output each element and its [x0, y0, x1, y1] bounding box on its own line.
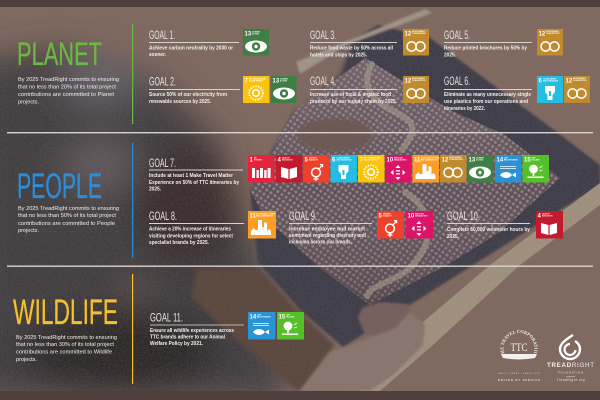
section divider top — [7, 132, 593, 133]
divider: wildlife — [132, 274, 133, 384]
goal 9: inclusion across our brands. — [289, 240, 353, 246]
goal 10: Complete 50,000 volunteer hours by — [447, 227, 530, 233]
text: people commitment: that no less than 50% of its total project — [18, 213, 117, 219]
icon: SDG 14 — [495, 155, 522, 182]
icon: SDG 13 — [271, 76, 296, 103]
goal 2: renewable sources by 2025. — [149, 99, 212, 105]
goal 1 — [149, 30, 239, 58]
icon: SDG 12: RESPONSIBLE — [573, 78, 587, 80]
goal 9: Increase employee and market — [289, 226, 365, 232]
goal 5: 2025. — [444, 52, 457, 58]
icon: SDG 14: BELOW WATER — [257, 316, 271, 319]
icon: SDG 15: ON LAND — [532, 159, 540, 162]
goal 2 — [149, 76, 240, 105]
icon: SDG 11 — [248, 211, 276, 238]
goal 3: Reduce food waste by 50% across all — [310, 46, 394, 52]
goal 10: GOAL 10. — [447, 211, 480, 223]
icon: SDG 7: AFFORDABLE AND — [364, 156, 381, 160]
logo: TreadRight Foundation: FOUNDATION — [558, 370, 583, 374]
text: wildlife commitment — [16, 335, 117, 363]
goal 11: GOAL 11. — [150, 312, 183, 324]
icon: SDG 13: ACTION — [476, 159, 484, 162]
logo: The Travel Corporation: THE TRAVEL CORPORATION — [500, 330, 538, 358]
icon: SDG 5: EQUALITY — [309, 159, 319, 162]
goal 6: itineraries by 2022. — [444, 106, 486, 112]
goal 8: visiting developing regions for select — [149, 234, 233, 240]
icon: SDG 13: CLIMATE — [476, 156, 485, 160]
goal 2: Source 50% of our electricity from — [149, 92, 228, 98]
photo: brown blur behind top row — [297, 118, 373, 152]
icon: SDG 10: 10 — [386, 158, 394, 164]
goal 6: GOAL 6. — [444, 76, 470, 88]
goal 7: Experience on 50% of TTC itineraries by — [149, 180, 239, 186]
icon: SDG 13: 13 — [244, 32, 252, 38]
top band — [0, 0, 600, 7]
icon: SDG 5 — [377, 211, 404, 238]
icon: SDG 12: CONSUMPTION — [412, 33, 426, 35]
icon: SDG 11: SUSTAINABLE CITIES — [420, 156, 440, 160]
icon: SDG 5: GENDER — [383, 214, 391, 216]
icon: SDG 4: QUALITY — [542, 212, 551, 216]
text: people commitment: contributions are committed to People — [18, 221, 115, 227]
icon: SDG 7: 7 — [360, 158, 364, 164]
icon: SDG 10 — [406, 211, 433, 238]
icon: SDG 6: AND SANITATION — [336, 159, 352, 162]
icon: SDG 12: 12 — [538, 32, 546, 38]
icon: SDG 15 — [277, 312, 304, 340]
photo: blurred person at left — [0, 48, 290, 400]
icon: SDG 4 — [536, 211, 563, 238]
goal 4: GOAL 4. — [310, 76, 336, 88]
logo: The Travel Corporation: DRIVEN BY SERVICE — [498, 378, 540, 382]
icon: SDG 12 — [440, 155, 466, 182]
icon: SDG 12: 12 — [404, 32, 412, 38]
logo: TreadRight Foundation — [547, 335, 594, 382]
icon: SDG 1 — [248, 155, 274, 182]
icon: SDG 6 — [537, 76, 563, 103]
icon: SDG 12: CONSUMPTION — [573, 80, 587, 82]
goal 3: GOAL 3. — [310, 30, 336, 42]
text: wildlife commitment: that no less than 30% of its total project — [16, 342, 115, 348]
goal 1: Achieve carbon neutrality by 2030 or — [149, 46, 233, 52]
icon: SDG 7: CLEAN ENERGY — [364, 159, 379, 162]
icon: SDG 11: 11 — [250, 214, 257, 220]
logo: The Travel Corporation: TTC — [510, 340, 528, 354]
text: people commitment — [18, 206, 119, 234]
icon: SDG 6: CLEAN WATER — [336, 156, 350, 160]
logo: The Travel Corporation: FAMILY OWNED | FAMILY RUN — [498, 372, 541, 375]
icon: SDG 13 — [243, 29, 269, 56]
text: wildlife commitment: contributions are committed to Wildlife — [16, 350, 112, 356]
goal 8: Achieve a 20% increase of itineraries — [149, 226, 231, 232]
text: planet commitment: By 2025 TreadRight commits to ensuring — [18, 77, 119, 83]
goal 6 — [444, 76, 532, 112]
photo: fingers — [358, 302, 412, 335]
goal 2: GOAL 2. — [149, 76, 176, 88]
section divider bottom — [7, 266, 593, 267]
icon: SDG 15: ON LAND — [286, 316, 295, 319]
heading: wildlife: WILDLIFE — [13, 293, 118, 332]
icon row: goal 7 SDGs — [248, 155, 549, 182]
goal 9 — [289, 211, 372, 246]
icon: SDG 15: LIFE — [286, 314, 291, 316]
icon: SDG 4: 4 — [278, 158, 282, 164]
goal 9: GOAL 9. — [289, 211, 317, 223]
goal 11 — [150, 312, 244, 347]
icon: SDG 7: CLEAN ENERGY — [249, 80, 264, 83]
icon: SDG 1: NO — [254, 158, 257, 160]
icon: SDG 12 — [537, 29, 563, 56]
icon: SDG 14: 14 — [496, 158, 504, 164]
icon: SDG 10: REDUCED — [394, 158, 404, 160]
photo: wooden frame — [358, 183, 600, 391]
goal 7 — [149, 158, 243, 192]
goal 4: Increase use of local & organic food — [310, 92, 391, 98]
icon: SDG 12: 12 — [566, 78, 573, 84]
panel: people — [17, 143, 563, 258]
icon: SDG 10: INEQUALITIES — [394, 159, 407, 162]
icon: SDG 15: LIFE — [532, 158, 536, 160]
icon: SDG 12: RESPONSIBLE — [546, 31, 560, 33]
goal 11: TTC brands adhere to our Animal — [150, 334, 226, 340]
icon: SDG 12: CONSUMPTION — [412, 80, 426, 82]
icon: SDG 11: SUSTAINABLE CITIES — [256, 212, 276, 216]
icon: SDG 6 — [330, 155, 357, 182]
bottom band — [0, 391, 600, 400]
icon: SDG 7 — [358, 155, 384, 182]
panel: wildlife — [13, 274, 304, 384]
icon: SDG 13: CLIMATE — [280, 78, 289, 80]
photo: hand — [300, 312, 425, 391]
icon: SDG 13: ACTION — [252, 33, 260, 36]
text: planet commitment: projects. — [18, 100, 39, 106]
icon: SDG 10: REDUCED — [415, 214, 425, 216]
goal 6: Eliminate as many unnecessary single — [444, 92, 531, 98]
photo: dotted artwork — [250, 58, 560, 305]
photo: sand left of canvas — [285, 44, 352, 112]
icon: SDG 14: LIFE — [257, 314, 262, 316]
goal 3: hotels and ships by 2025. — [310, 52, 368, 58]
icon: SDG 6: 6 — [538, 78, 542, 84]
icon: SDG 12 — [403, 76, 429, 103]
goal 5 — [444, 30, 532, 58]
icon: SDG 12: CONSUMPTION — [449, 159, 463, 161]
icon: SDG 7: AFFORDABLE AND — [249, 78, 266, 80]
text: people commitment: By 2025 TreadRight commits to ensuring — [18, 206, 119, 212]
icon: SDG 15 — [522, 155, 549, 182]
icon: SDG 6: AND SANITATION — [543, 80, 559, 83]
icon: SDG 7: 7 — [244, 78, 248, 84]
icon: SDG 4: EDUCATION — [542, 215, 553, 218]
icon: SDG 15: 15 — [524, 158, 531, 164]
photo: sandy patch lower middle — [192, 268, 335, 391]
logo: TreadRight Foundation: TREADRIGHT — [547, 362, 594, 369]
goal 4: products by our supply chain by 2025. — [310, 99, 398, 105]
divider: planet — [132, 24, 133, 124]
logo: The Travel Corporation — [498, 330, 541, 382]
goal 9: sentiment regarding diversity and — [289, 233, 366, 239]
text: planet commitment — [18, 77, 119, 106]
goal 1: GOAL 1. — [149, 30, 175, 42]
photo: painted snake — [367, 64, 428, 296]
icon: SDG 10 — [385, 155, 412, 182]
icon: SDG 14 — [248, 312, 276, 340]
icon: SDG 12 — [403, 29, 429, 56]
icon: SDG 6: CLEAN WATER — [543, 78, 557, 80]
icon: SDG 14: BELOW WATER — [504, 159, 518, 162]
icon: SDG 12: CONSUMPTION — [546, 33, 560, 35]
icon: SDG 12: RESPONSIBLE — [412, 78, 426, 80]
goal 8: GOAL 8. — [149, 211, 177, 223]
photo: wooden stick — [296, 9, 432, 74]
icon: SDG 4 — [276, 155, 302, 182]
goal 6: use plastics from our operations and — [444, 99, 528, 105]
icon: SDG 5 — [303, 155, 330, 182]
icon: SDG 4: 4 — [538, 214, 542, 220]
text: wildlife commitment: By 2025 TreadRight commits to ensuring — [16, 335, 117, 341]
goal 10 — [447, 211, 530, 240]
icon: SDG 5: EQUALITY — [383, 215, 393, 218]
icon: SDG 11 — [412, 155, 440, 182]
icon: SDG 7 — [243, 76, 270, 103]
icon: SDG 14: 14 — [250, 314, 257, 320]
photo: dark canvas — [250, 25, 600, 347]
goal 10: 2025. — [447, 234, 460, 240]
icon: SDG 10: 10 — [408, 214, 415, 220]
icon: SDG 13: CLIMATE — [252, 30, 261, 34]
panel: planet — [17, 24, 590, 124]
goal 7: GOAL 7. — [149, 158, 176, 170]
goal 1: sooner. — [149, 52, 167, 58]
icon: SDG 15: 15 — [278, 314, 286, 320]
icon: SDG 12 — [564, 76, 590, 103]
goal 3 — [310, 30, 397, 58]
goal 11: Ensure all wildlife experiences across — [150, 328, 234, 334]
icon: SDG 12: RESPONSIBLE — [449, 157, 463, 159]
text: wildlife commitment: projects. — [16, 357, 37, 363]
icon: SDG 4: QUALITY — [282, 156, 291, 160]
heading: planet: PLANET — [17, 36, 102, 72]
icon: SDG 5: GENDER — [309, 158, 317, 160]
icon: SDG 1: 1 — [250, 158, 254, 164]
divider: people — [132, 143, 133, 258]
icon: SDG 4: EDUCATION — [282, 159, 293, 162]
goal 8 — [149, 211, 244, 246]
heading: people: PEOPLE — [17, 167, 102, 206]
icon: SDG 13 — [467, 155, 494, 182]
icon: SDG 10: INEQUALITIES — [415, 215, 428, 218]
icon: SDG 12: RESPONSIBLE — [412, 31, 426, 33]
icon: SDG 13: ACTION — [280, 80, 288, 83]
icon: SDG 12: 12 — [404, 78, 412, 84]
goal 7: 2025. — [149, 186, 162, 192]
text: planet commitment: contributions are committed to Planet — [18, 92, 115, 98]
icon: SDG 11: 11 — [414, 158, 421, 164]
text: planet commitment: that no less than 20% of its total project — [18, 84, 117, 90]
icon: SDG 12: 12 — [442, 158, 449, 164]
text: people commitment: projects. — [18, 228, 39, 234]
icon: SDG 13: 13 — [468, 158, 476, 164]
icon: SDG 5: 5 — [378, 214, 382, 220]
goal 8: specialist brands by 2025. — [149, 240, 210, 246]
logo: TreadRight Foundation: TreadRight.org — [556, 378, 585, 382]
icon: SDG 11: AND COMMUNITIES — [420, 159, 438, 162]
goal 11: Welfare Policy by 2021. — [150, 341, 204, 347]
goal 5: GOAL 5. — [444, 30, 470, 42]
icon: SDG 14: LIFE — [504, 158, 509, 160]
goal 4 — [310, 76, 398, 105]
icon: SDG 13: 13 — [272, 78, 280, 84]
icon: SDG 6: 6 — [332, 158, 336, 164]
icon: SDG 5: 5 — [304, 158, 308, 164]
icon: SDG 1: POVERTY — [254, 160, 263, 162]
goal 5: Reduce printed brochures by 50% by — [444, 46, 527, 52]
icon: SDG 11: AND COMMUNITIES — [256, 215, 274, 218]
goal 7: Include at least 1 Make Travel Matter — [149, 173, 233, 179]
